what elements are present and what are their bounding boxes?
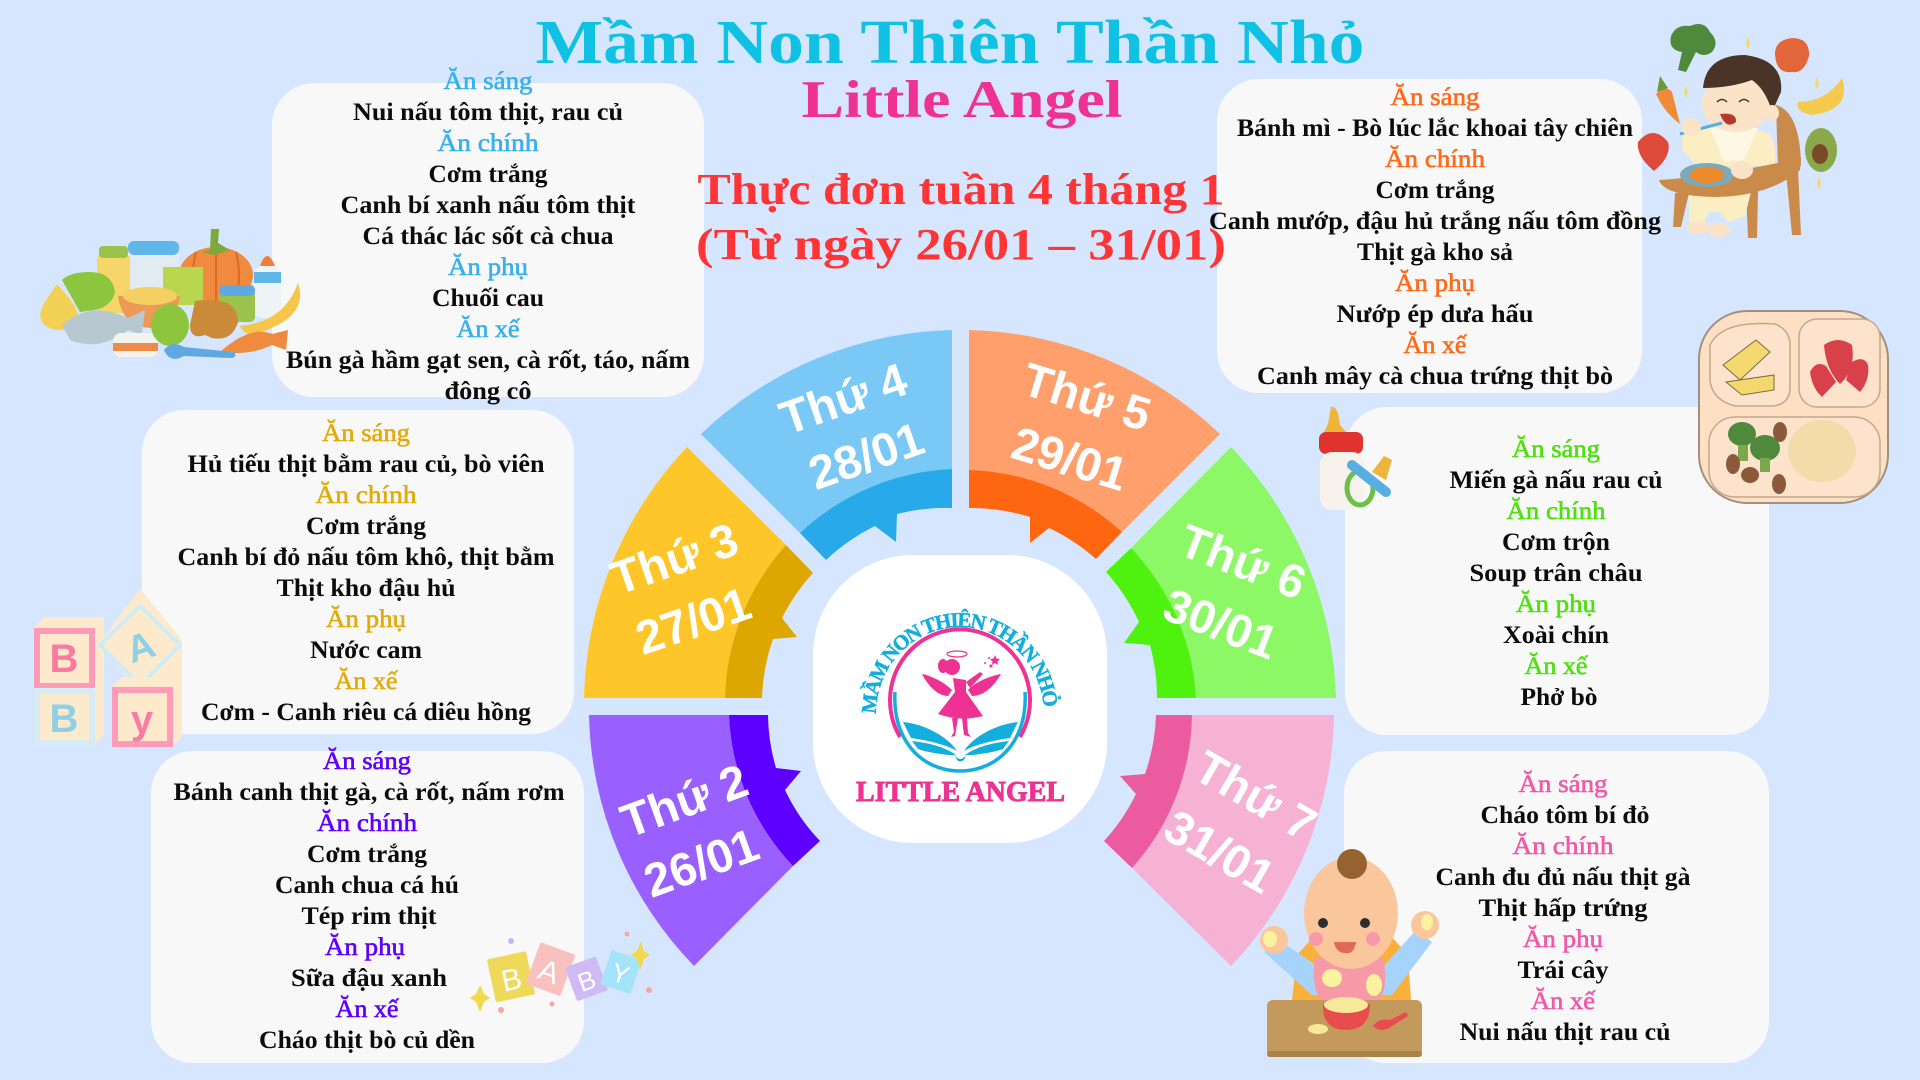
panel: Thứ 5 menu: Cơm trắng	[1376, 177, 1495, 204]
panel: Thứ 4 menu: Cá thác lác sốt cà chua	[362, 223, 614, 250]
panel: Thứ 6 menu: Soup trân châu	[1470, 560, 1643, 587]
heading: weekly menu dates: (Từ ngày 26/01 – 31/01)	[696, 220, 1226, 269]
panel: Thứ 6 menu	[1345, 407, 1769, 735]
panel: Thứ 3 menu: Cơm trắng	[306, 513, 426, 540]
panel: Thứ 2 menu: Ăn phụ	[325, 933, 406, 961]
panel: Thứ 7 menu: Trái cây	[1518, 957, 1609, 984]
panel: Thứ 5 menu	[1209, 79, 1662, 393]
panel: Thứ 6 menu: Ăn chính	[1506, 497, 1606, 525]
panel: Thứ 7 menu: Nui nấu thịt rau củ	[1460, 1019, 1671, 1046]
panel: Thứ 7 menu: Canh đu đủ nấu thịt gà	[1436, 864, 1691, 891]
wheel segment: Thứ 7: Thứ 7	[1186, 740, 1326, 851]
panel: Thứ 3 menu: Cơm - Canh riêu cá diêu hồng	[201, 699, 531, 726]
panel: Thứ 5 menu: Canh mây cà chua trứng thịt bò	[1257, 363, 1613, 390]
wheel segment: Thứ 3: 27/01	[629, 576, 757, 665]
panel: Thứ 2 menu: Cơm trắng	[307, 841, 427, 868]
wheel segment: Thứ 5: Thứ 5	[1017, 352, 1157, 441]
panel: Thứ 7 menu	[1344, 751, 1769, 1063]
wheel segment: Thứ 7: 31/01	[1156, 799, 1284, 904]
panel: Thứ 2 menu: Ăn sáng	[323, 747, 412, 775]
wheel segment: Thứ 2: 26/01	[637, 817, 766, 907]
panel: Thứ 3 menu: Ăn xế	[334, 667, 398, 695]
panel: Thứ 6 menu: Ăn phụ	[1516, 590, 1597, 618]
wheel segment: Thứ 6: Thứ 6	[1172, 513, 1313, 610]
panel: Thứ 2 menu: Canh chua cá hú	[275, 872, 459, 899]
panel: Thứ 7 menu: Ăn xế	[1531, 987, 1596, 1015]
icon: alphabet blocks BABY: A	[121, 624, 160, 672]
panel: Thứ 7 menu: Cháo tôm bí đỏ	[1480, 802, 1650, 829]
wheel segment: Thứ 5	[969, 330, 1220, 559]
subtitle: Little Angel: Little Angel	[802, 71, 1122, 129]
panel: Thứ 5 menu: Thịt gà kho sả	[1357, 239, 1514, 266]
panel: Thứ 3 menu: Ăn phụ	[326, 605, 407, 633]
wheel segment: Thứ 2: Thứ 2	[614, 753, 755, 848]
panel: Thứ 3 menu	[142, 410, 574, 734]
panel: Thứ 4 menu: Ăn xế	[456, 315, 520, 343]
wheel segment: Thứ 3	[584, 447, 813, 698]
panel: Thứ 6 menu: Xoài chín	[1503, 622, 1609, 649]
panel: Thứ 6 menu: Cơm trộn	[1502, 529, 1610, 556]
wheel segment: Thứ 3: Thứ 3	[604, 512, 745, 605]
panel: Thứ 2 menu: Tép rim thịt	[302, 903, 437, 930]
panel: Thứ 2 menu: Sữa đậu xanh	[291, 965, 447, 992]
panel: Thứ 6 menu: Ăn sáng	[1512, 435, 1601, 463]
wheel segment: Thứ 4: Thứ 4	[773, 352, 914, 445]
panel: Thứ 6 menu: Miến gà nấu rau củ	[1450, 467, 1663, 494]
logo ring	[890, 629, 1030, 771]
panel: Thứ 2 menu: Cháo thịt bò củ dền	[259, 1027, 475, 1054]
icon: alphabet blocks BABY: B	[50, 697, 78, 741]
panel: Thứ 3 menu: Hủ tiếu thịt bằm rau củ, bò viên	[188, 451, 545, 478]
panel: Thứ 3 menu: Ăn chính	[316, 481, 417, 509]
heading: weekly menu dates: Thực đơn tuần 4 tháng 1	[698, 165, 1224, 214]
panel: Thứ 6 menu: Phở bò	[1520, 684, 1598, 711]
panel: Thứ 4 menu: đông cô	[444, 378, 532, 405]
panel: Thứ 4 menu: Cơm trắng	[428, 161, 548, 188]
panel: Thứ 5 menu: Bánh mì - Bò lúc lắc khoai tây chiên	[1237, 115, 1633, 142]
icon: food pile	[40, 229, 300, 359]
panel: Thứ 4 menu: Bún gà hầm gạt sen, cà rốt, táo, nấm	[286, 347, 690, 374]
panel: Thứ 5 menu: Ăn phụ	[1395, 269, 1476, 297]
panel: Thứ 2 menu	[151, 747, 584, 1063]
panel: Thứ 2 menu: Ăn chính	[317, 809, 418, 837]
panel: Thứ 4 menu: Ăn phụ	[448, 253, 529, 281]
panel: Thứ 4 menu: Nui nấu tôm thịt, rau củ	[353, 99, 623, 126]
panel: Thứ 7 menu: Ăn sáng	[1518, 770, 1608, 798]
wheel segment: Thứ 4: 28/01	[802, 411, 930, 500]
panel: Thứ 5 menu: Ăn sáng	[1390, 83, 1480, 111]
panel: Thứ 5 menu: Canh mướp, đậu hủ trắng nấu tôm đồng	[1209, 208, 1662, 235]
panel: Thứ 4 menu: Chuối cau	[432, 285, 544, 312]
icon: alphabet blocks BABY: B	[50, 637, 78, 681]
logo open book	[903, 722, 1018, 762]
panel: Thứ 5 menu: Nướp ép dưa hấu	[1336, 301, 1534, 328]
logo wordmark: LITTLE ANGEL	[856, 777, 1065, 808]
logo angel	[922, 651, 1001, 737]
icon: alphabet blocks BABY	[34, 589, 182, 747]
panel: Thứ 7 menu: Ăn chính	[1512, 832, 1614, 860]
icon: baby bottle and pacifier	[1319, 407, 1392, 510]
heading: weekly menu dates	[696, 165, 1226, 269]
panel: Thứ 4 menu: Ăn sáng	[444, 67, 533, 95]
panel: Thứ 2 menu: Ăn xế	[336, 995, 399, 1023]
panel: Thứ 6 menu: Ăn xế	[1524, 652, 1588, 680]
panel: Thứ 3 menu: Ăn sáng	[322, 419, 411, 447]
panel: Thứ 7 menu: Thịt hấp trứng	[1478, 895, 1648, 922]
logo arc text: MẦM NON THIÊN THẦN NHỎ	[860, 608, 1061, 714]
icon: BABY tiles: A	[534, 953, 564, 991]
icon: baby eating with fruits	[1638, 24, 1844, 238]
wheel segment: Thứ 6	[1106, 447, 1336, 698]
panel: Thứ 2 menu: Bánh canh thịt gà, cà rốt, nấm rơm	[174, 779, 565, 806]
panel: Thứ 4 menu: Ăn chính	[438, 129, 539, 157]
panel: Thứ 3 menu: Canh bí đỏ nấu tôm khô, thịt bằm	[178, 544, 555, 571]
panel: Thứ 4 menu	[272, 67, 704, 405]
panel: Thứ 7 menu: Ăn phụ	[1523, 925, 1604, 953]
icon: BABY tiles	[470, 932, 652, 1013]
panel: Thứ 4 menu: Canh bí xanh nấu tôm thịt	[340, 192, 636, 219]
panel: Thứ 5 menu: Ăn xế	[1404, 331, 1467, 359]
panel: Thứ 5 menu: Ăn chính	[1385, 145, 1486, 173]
panel: Thứ 3 menu: Nước cam	[310, 637, 422, 664]
title: school name: Mầm Non Thiên Thần Nhỏ	[536, 9, 1364, 77]
icon: baby with porridge	[1260, 849, 1439, 1057]
wheel segment: Thứ 7	[1104, 715, 1334, 966]
wheel segment: Thứ 4	[701, 330, 952, 560]
panel: Thứ 3 menu: Thịt kho đậu hủ	[276, 575, 456, 602]
wheel segment: Thứ 6: 30/01	[1156, 578, 1285, 669]
icon: BABY tiles: B	[498, 962, 525, 998]
icon: BABY tiles: B	[573, 964, 600, 998]
wheel segment: Thứ 2	[589, 715, 820, 966]
center logo card	[813, 555, 1107, 843]
wheel segment: Thứ 5: 29/01	[1006, 416, 1134, 501]
icon: divided food plate	[1699, 311, 1888, 503]
icon: alphabet blocks BABY: y	[131, 698, 154, 742]
icon: BABY tiles: Y	[607, 957, 633, 991]
